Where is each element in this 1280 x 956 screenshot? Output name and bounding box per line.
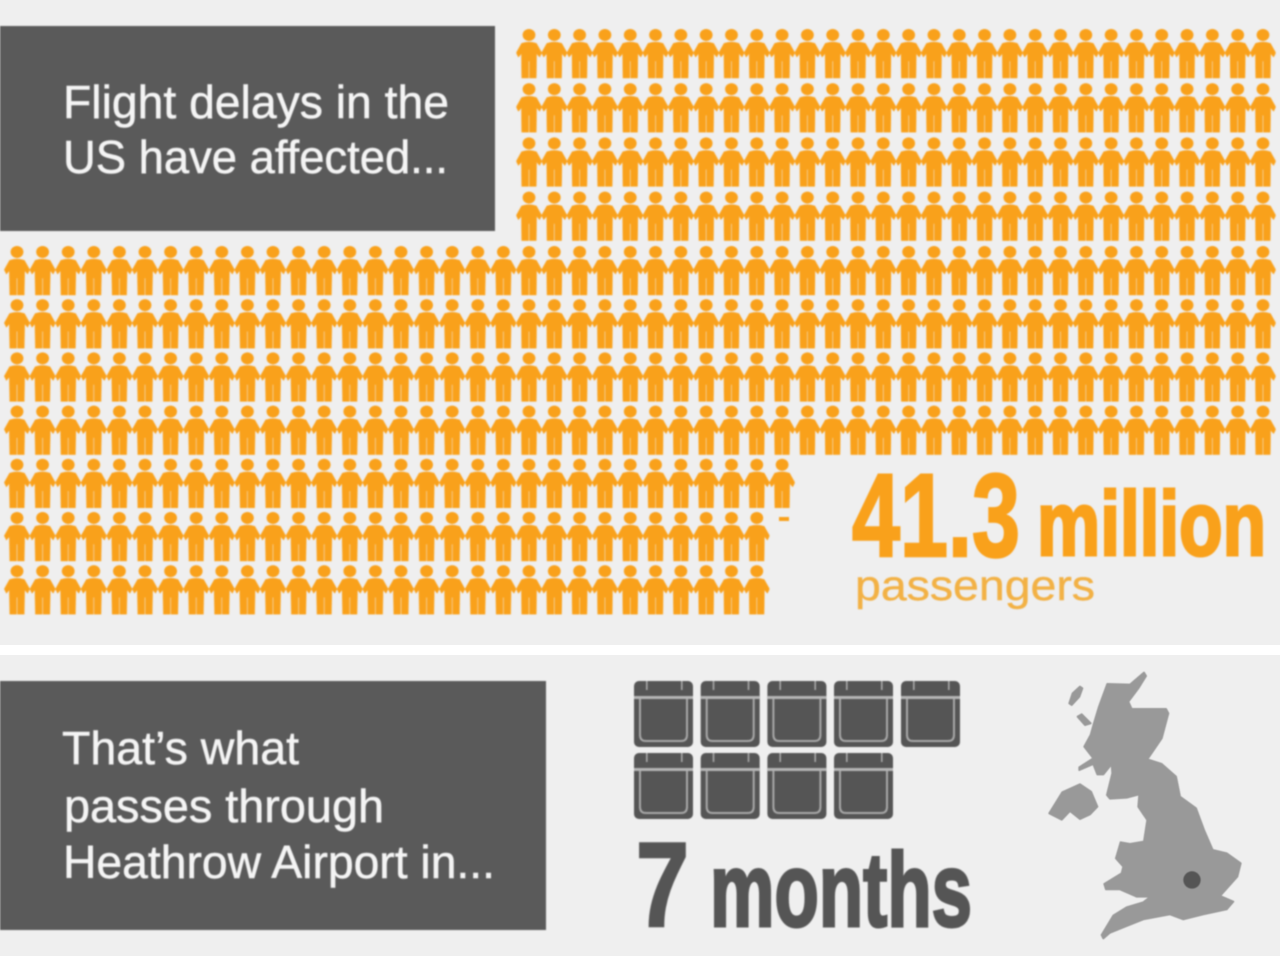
statistic: 7 months: months bbox=[710, 832, 972, 949]
heading panel: Heathrow comparison: That’s what bbox=[62, 722, 299, 774]
statistic: 41.3 million passengers: 41.3 bbox=[852, 450, 1020, 582]
icons: nine calendars bbox=[634, 681, 960, 819]
statistic: 41.3 million passengers bbox=[852, 450, 1266, 610]
heading panel: flight delays: US have affected... bbox=[63, 131, 448, 183]
statistic: 7 months: 7 bbox=[636, 818, 689, 952]
divider between sections bbox=[0, 645, 1280, 655]
statistic: 41.3 million passengers: passengers bbox=[855, 562, 1095, 610]
pictogram: rows of orange passengers bbox=[4, 28, 1276, 617]
heading panel: Heathrow comparison: Heathrow Airport in... bbox=[63, 836, 495, 888]
statistic: 7 months bbox=[636, 818, 972, 952]
heading panel: Heathrow comparison: passes through bbox=[64, 780, 384, 832]
map: UK with Heathrow marker bbox=[1049, 673, 1241, 938]
heading panel: flight delays bbox=[0, 26, 495, 231]
heading panel: Heathrow comparison bbox=[0, 681, 546, 930]
heading panel: flight delays: Flight delays in the bbox=[63, 76, 449, 128]
